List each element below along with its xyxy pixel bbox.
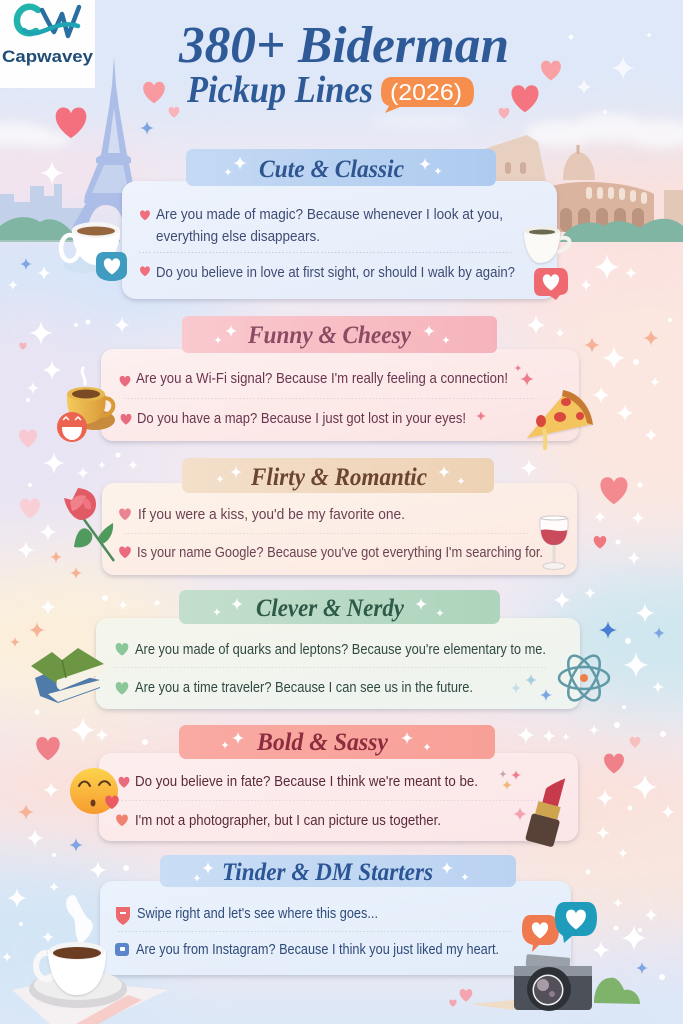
pickup line 1 bbox=[116, 906, 378, 925]
pickup line 1: Are you made of magic? Because whenever I look at you, bbox=[156, 207, 503, 223]
logo: Capwavey bbox=[0, 0, 95, 88]
smiley bbox=[57, 412, 87, 442]
pickup line 1: Swipe right and let's see where this goes... bbox=[137, 906, 378, 922]
pickup line 2: Do you believe in love at first sight, or should I walk by again? bbox=[156, 265, 515, 281]
colored sparkles bbox=[10, 121, 665, 974]
header ribbon: Tinder & DM Starters bbox=[222, 859, 433, 886]
year badge: (2026) bbox=[390, 79, 462, 105]
icon: rose bbox=[64, 488, 114, 561]
header ribbon bbox=[179, 590, 500, 624]
title line 1: 380+ Biderman bbox=[178, 17, 509, 74]
panel: Tinder & DM Starters bbox=[100, 855, 571, 975]
scene: Eiffel tower and Paris skyline bbox=[0, 57, 142, 241]
pickup line 1: Are you a Wi-Fi signal? Because I'm really feeling a connection! bbox=[136, 371, 508, 387]
panel: Flirty & Romantic bbox=[102, 458, 577, 575]
pickup line 1: If you were a kiss, you'd be my favorite one. bbox=[138, 507, 405, 523]
panel: Clever & Nerdy bbox=[96, 590, 580, 709]
header ribbon bbox=[182, 316, 497, 353]
card bbox=[99, 753, 578, 841]
icon: pizza slice bbox=[527, 390, 593, 448]
pickup line 2: I'm not a photographer, but I can picture us together. bbox=[135, 813, 441, 829]
logo wordmark: Capwavey bbox=[2, 47, 94, 66]
icon: kissing face emoji bbox=[70, 768, 119, 814]
header ribbon bbox=[179, 725, 495, 759]
title line 2: Pickup Lines bbox=[186, 69, 373, 111]
bottom table scene bbox=[12, 980, 514, 1024]
pickup line 2: Are you a time traveler? Because I can see us in the future. bbox=[135, 680, 473, 696]
pickup line 1: everything else disappears. bbox=[156, 229, 320, 245]
year badge bbox=[381, 77, 474, 113]
header ribbon: Bold & Sassy bbox=[256, 729, 389, 756]
skyline bbox=[0, 184, 86, 235]
pickup line 1: Are you made of quarks and leptons? Because you're elementary to me. bbox=[135, 642, 546, 658]
header ribbon: Flirty & Romantic bbox=[250, 464, 427, 491]
panel: Bold & Sassy bbox=[99, 725, 578, 841]
icon: blue heart bubble bbox=[96, 252, 127, 281]
card bbox=[102, 483, 577, 575]
pickup line 2: Are you from Instagram? Because I think you just liked my heart. bbox=[136, 942, 499, 958]
panel: Cute & Classic bbox=[122, 149, 557, 299]
title bbox=[178, 17, 509, 113]
panel: Funny & Cheesy bbox=[101, 316, 579, 441]
icon: atom bbox=[559, 651, 609, 705]
eiffel tower bbox=[72, 57, 142, 228]
header ribbon bbox=[160, 855, 516, 887]
icon: coffee cup left bbox=[61, 222, 120, 273]
pickup line 1 bbox=[140, 207, 503, 245]
icon: steam heart bbox=[66, 895, 93, 945]
icon: orange heart bubble bbox=[522, 915, 559, 952]
pickup line 2: Do you have a map? Because I just got lost in your eyes! bbox=[137, 411, 466, 427]
header ribbon: Cute & Classic bbox=[259, 156, 404, 183]
card bbox=[101, 349, 579, 441]
header ribbon: Funny & Cheesy bbox=[247, 322, 412, 349]
pickup line 2: Is your name Google? Because you've got everything I'm searching for. bbox=[137, 545, 543, 561]
icon: teal heart bubble bbox=[555, 902, 597, 943]
card bbox=[96, 618, 580, 709]
header ribbon: Clever & Nerdy bbox=[256, 595, 405, 622]
icon: coffee cup bottom bbox=[29, 942, 127, 1008]
scene: Colosseum and Rome bbox=[470, 135, 683, 242]
icon: green bush bbox=[594, 978, 640, 1004]
icon: red heart bubble bbox=[534, 268, 568, 300]
icon: lipstick bbox=[525, 772, 571, 847]
card bbox=[100, 881, 571, 975]
icon: coffee cup right bbox=[524, 227, 570, 263]
header ribbon bbox=[182, 458, 494, 493]
icon: golden mug with smiley bbox=[57, 368, 115, 442]
icon: camera bbox=[514, 954, 592, 1011]
pickup line 1: Do you believe in fate? Because I think we're meant to be. bbox=[135, 774, 478, 790]
card bbox=[122, 181, 557, 299]
header ribbon bbox=[186, 149, 496, 186]
icon: wine glass bbox=[540, 516, 568, 570]
icon: stacked books bbox=[31, 648, 104, 703]
icon: CW wave mark bbox=[17, 7, 79, 36]
